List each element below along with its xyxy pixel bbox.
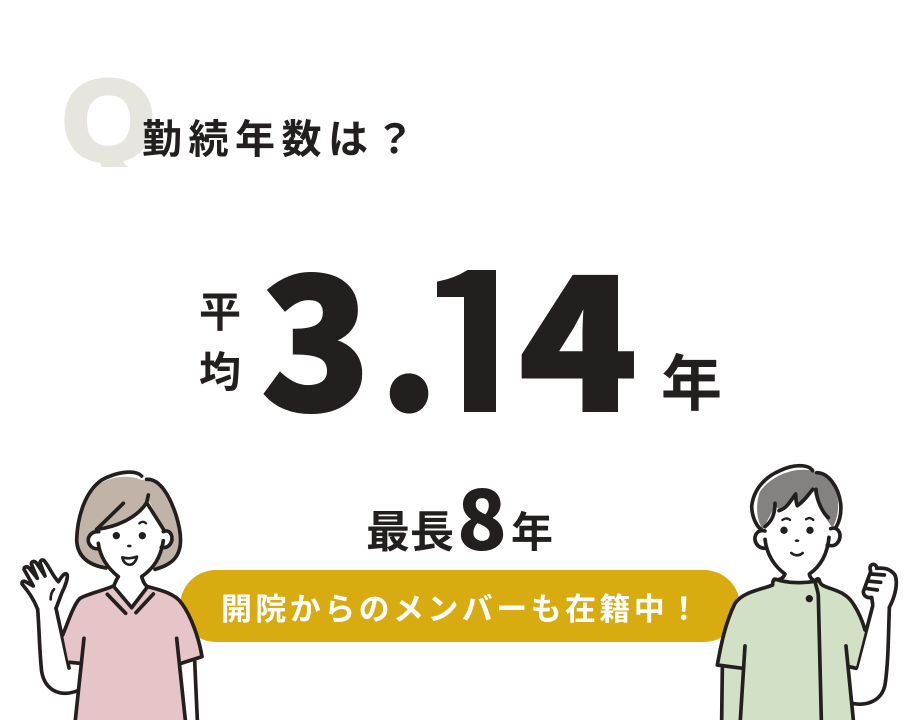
face <box>763 490 832 582</box>
icon: large Q mark: Q <box>62 57 155 184</box>
big number: 3.14 <box>263 270 634 414</box>
big number: 3.14: 3 <box>261 201 371 462</box>
left arm and raised hand <box>22 560 83 693</box>
illustration: woman in pink scrubs waving <box>22 472 202 720</box>
big number: 3.14: 1 <box>419 202 530 465</box>
hair <box>757 470 838 529</box>
subheading: maximum 8 years: 年 <box>511 509 553 556</box>
raised arm and fist <box>852 568 896 704</box>
illustration: man in green scrubs with raised fist <box>717 466 896 720</box>
big number: 3.14: 4 <box>519 202 637 462</box>
banner text: 開院からのメンバーも在籍中！ <box>221 592 703 627</box>
label: average (vertical) <box>199 289 241 396</box>
green top <box>717 581 865 720</box>
hair <box>77 477 181 569</box>
label: average (vertical): 平 <box>199 289 241 336</box>
pink top <box>63 586 202 720</box>
heading: question: 勤続年数は？ <box>142 118 421 162</box>
banner pill <box>180 570 740 642</box>
label: average (vertical): 均 <box>199 349 241 396</box>
unit: years: 年 <box>661 350 722 418</box>
face and neck <box>97 500 165 608</box>
subheading: maximum 8 years: 8 <box>457 455 507 574</box>
big number: 3.14: . <box>377 201 441 464</box>
subheading: maximum 8 years <box>366 455 553 574</box>
subheading: maximum 8 years: 最長 <box>366 508 454 557</box>
